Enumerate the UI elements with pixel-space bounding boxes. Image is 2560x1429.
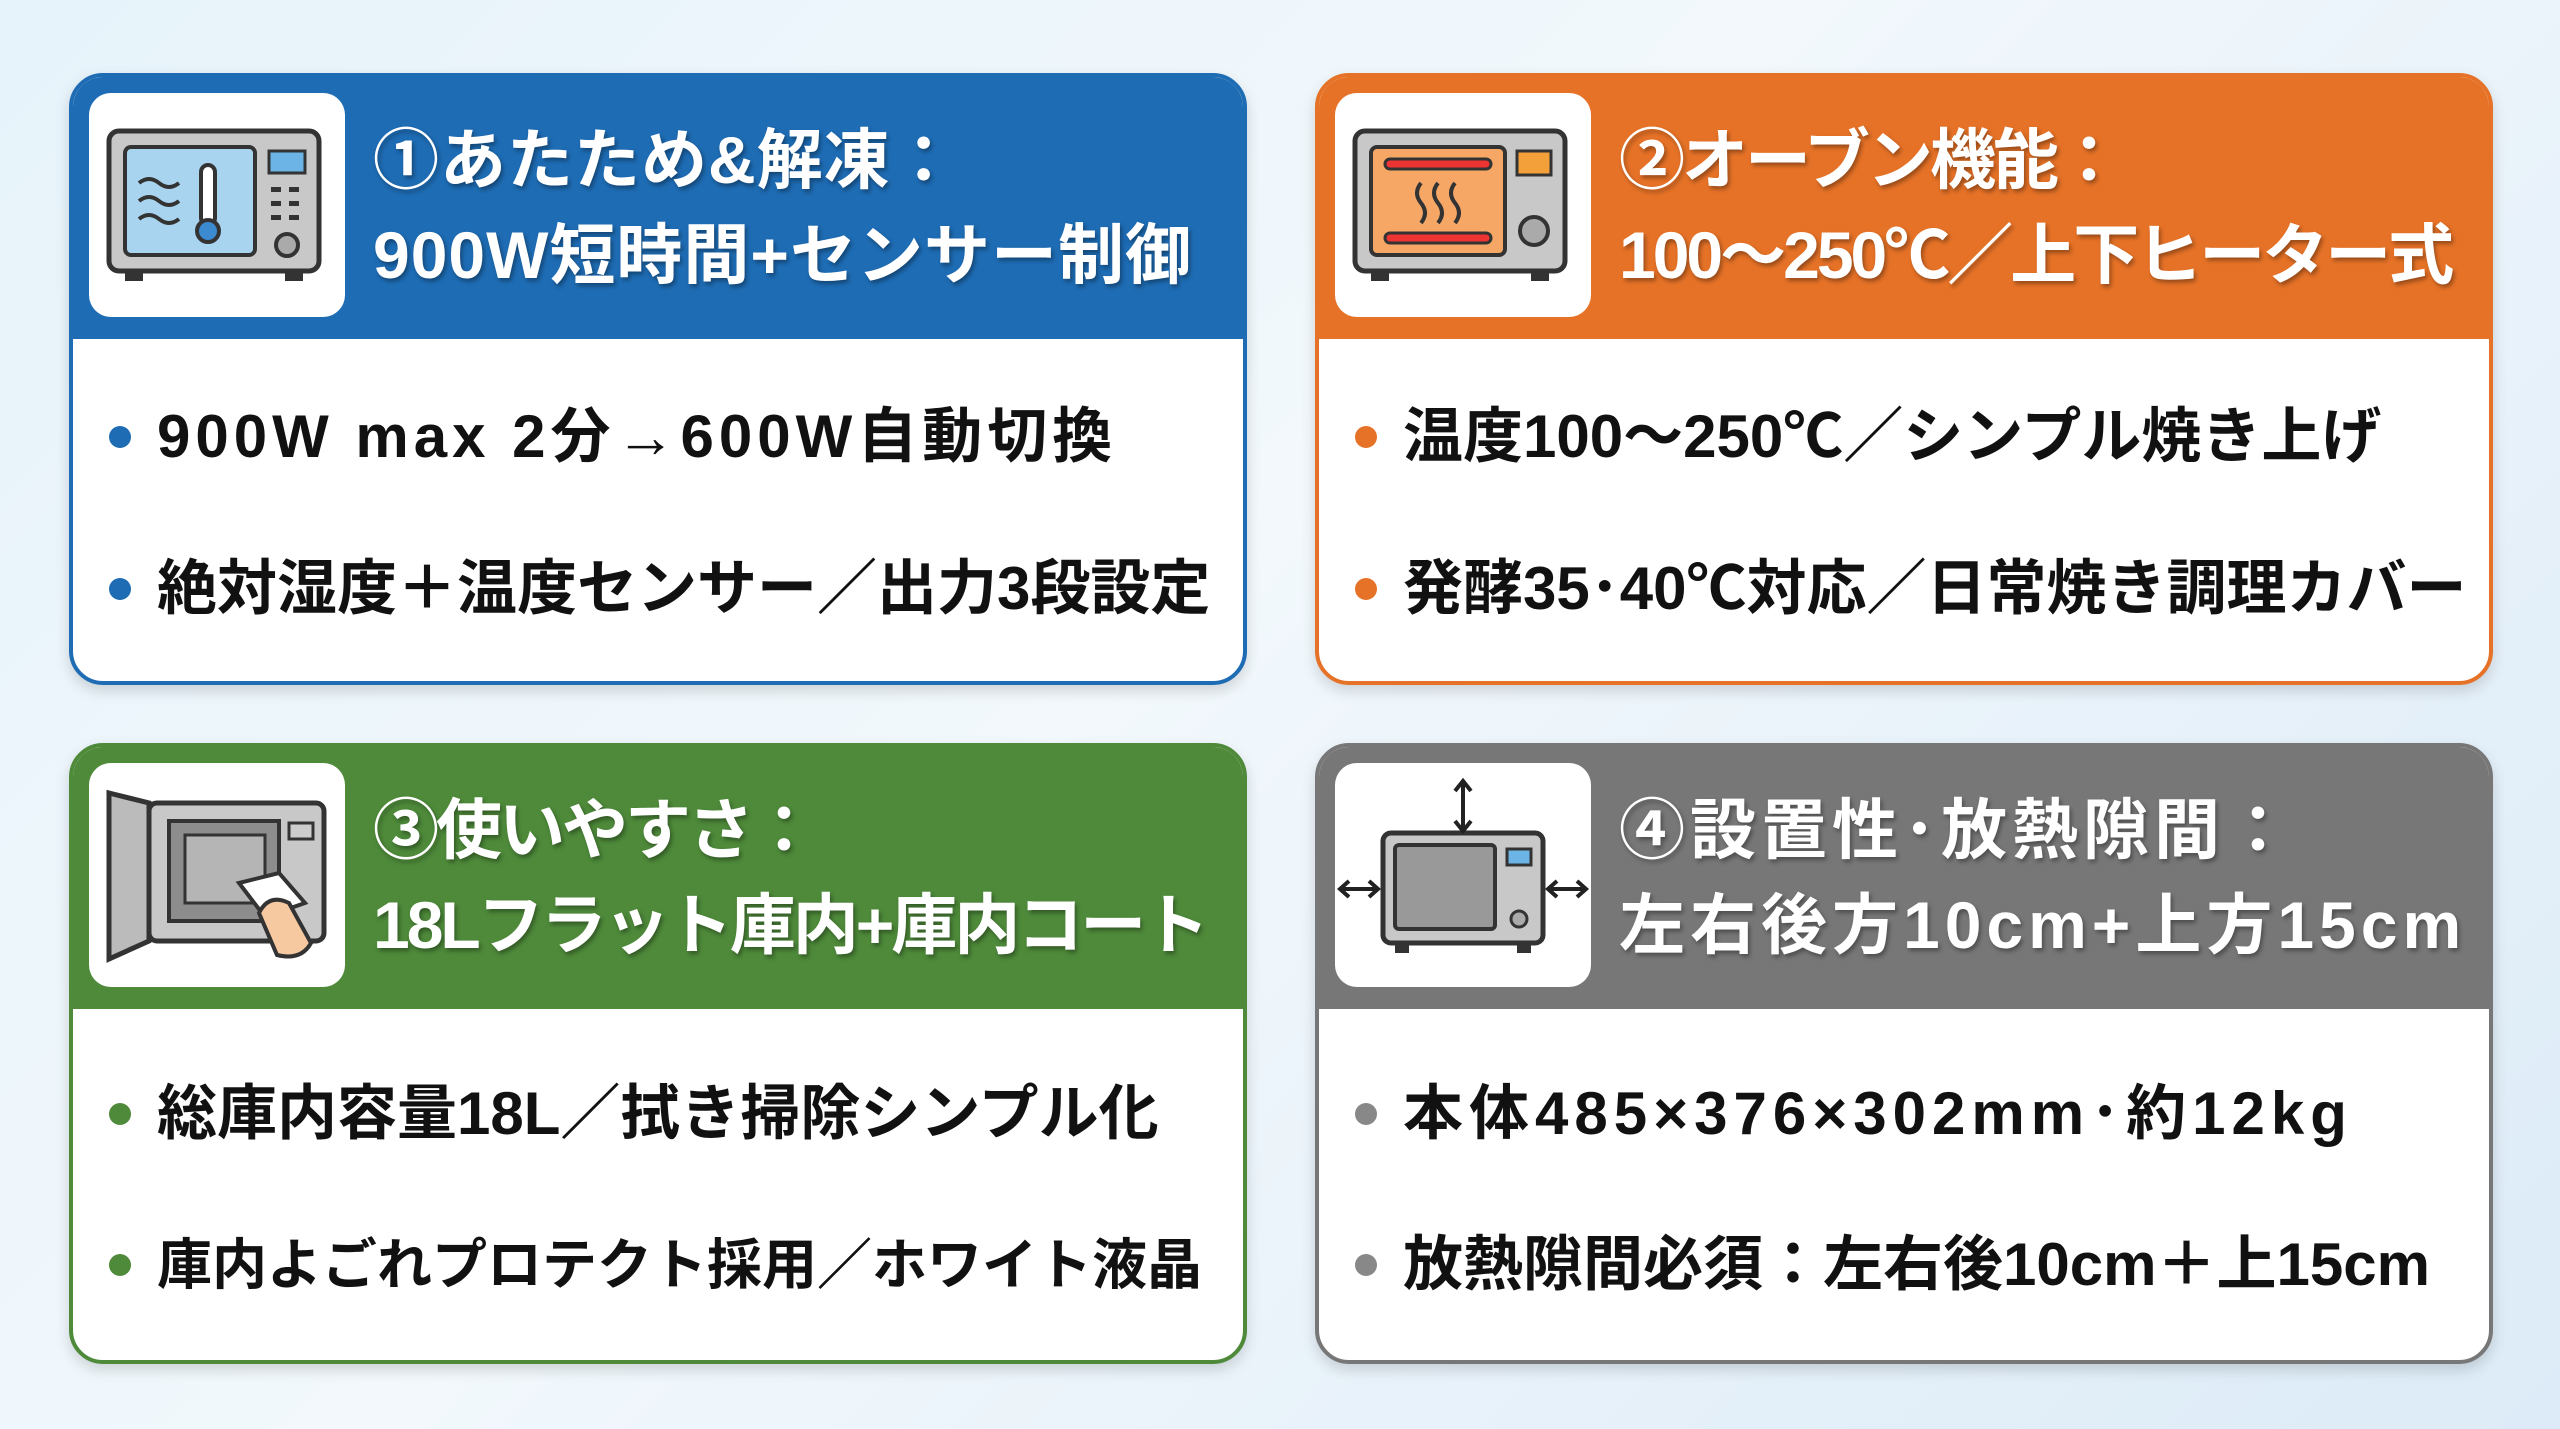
- panel: oven: [1315, 73, 2493, 685]
- header text: [1619, 123, 2457, 292]
- header text: 18Lフラット庫内+庫内コート: [373, 888, 1206, 962]
- header text: ③使いやすさ：: [373, 793, 814, 867]
- header text: ①あたため&解凍：: [373, 123, 958, 197]
- header text: 左右後方10cm+上方15cm: [1619, 888, 2466, 962]
- bullet 1: 温度100～250℃／シンプル焼き上げ: [1403, 403, 2381, 470]
- header text: [373, 123, 1192, 292]
- header text: 100～250℃／上下ヒーター式: [1619, 218, 2451, 292]
- bullet 2: 絶対湿度＋温度センサー／出力3段設定: [157, 555, 1210, 622]
- panel: installation: [1315, 743, 2493, 1364]
- panel: heating & defrost: [69, 73, 1247, 685]
- bullet 2: 放熱隙間必須：左右後10cm＋上15cm: [1403, 1231, 2430, 1298]
- icon: microwave with thermometer: [89, 93, 345, 317]
- bullet 1: 本体485×376×302mm･約12kg: [1403, 1080, 2353, 1147]
- header text: [373, 793, 1206, 962]
- header text: 900W短時間+センサー制御: [373, 218, 1192, 292]
- header text: [1619, 793, 2466, 962]
- bullet 1: 総庫内容量18L／拭き掃除シンプル化: [157, 1080, 1159, 1147]
- header: oven: [1319, 77, 2489, 339]
- header: installation: [1319, 747, 2489, 1009]
- icon: open microwave with hand wiping: [89, 763, 345, 987]
- header: usability: [73, 747, 1243, 1009]
- header text: ②オーブン機能：: [1619, 123, 2119, 197]
- bullet 2: 庫内よごれプロテクト採用／ホワイト液晶: [157, 1234, 1202, 1296]
- bullet 1: 900W max 2分→600W自動切換: [157, 403, 1117, 470]
- icon: microwave with clearance arrows: [1335, 763, 1591, 987]
- panel: usability: [69, 743, 1247, 1364]
- header text: ④設置性･放熱隙間：: [1619, 793, 2296, 867]
- icon: oven: [1335, 93, 1591, 317]
- header: heating: [73, 77, 1243, 339]
- bullet 2: 発酵35･40℃対応／日常焼き調理カバー: [1403, 555, 2466, 622]
